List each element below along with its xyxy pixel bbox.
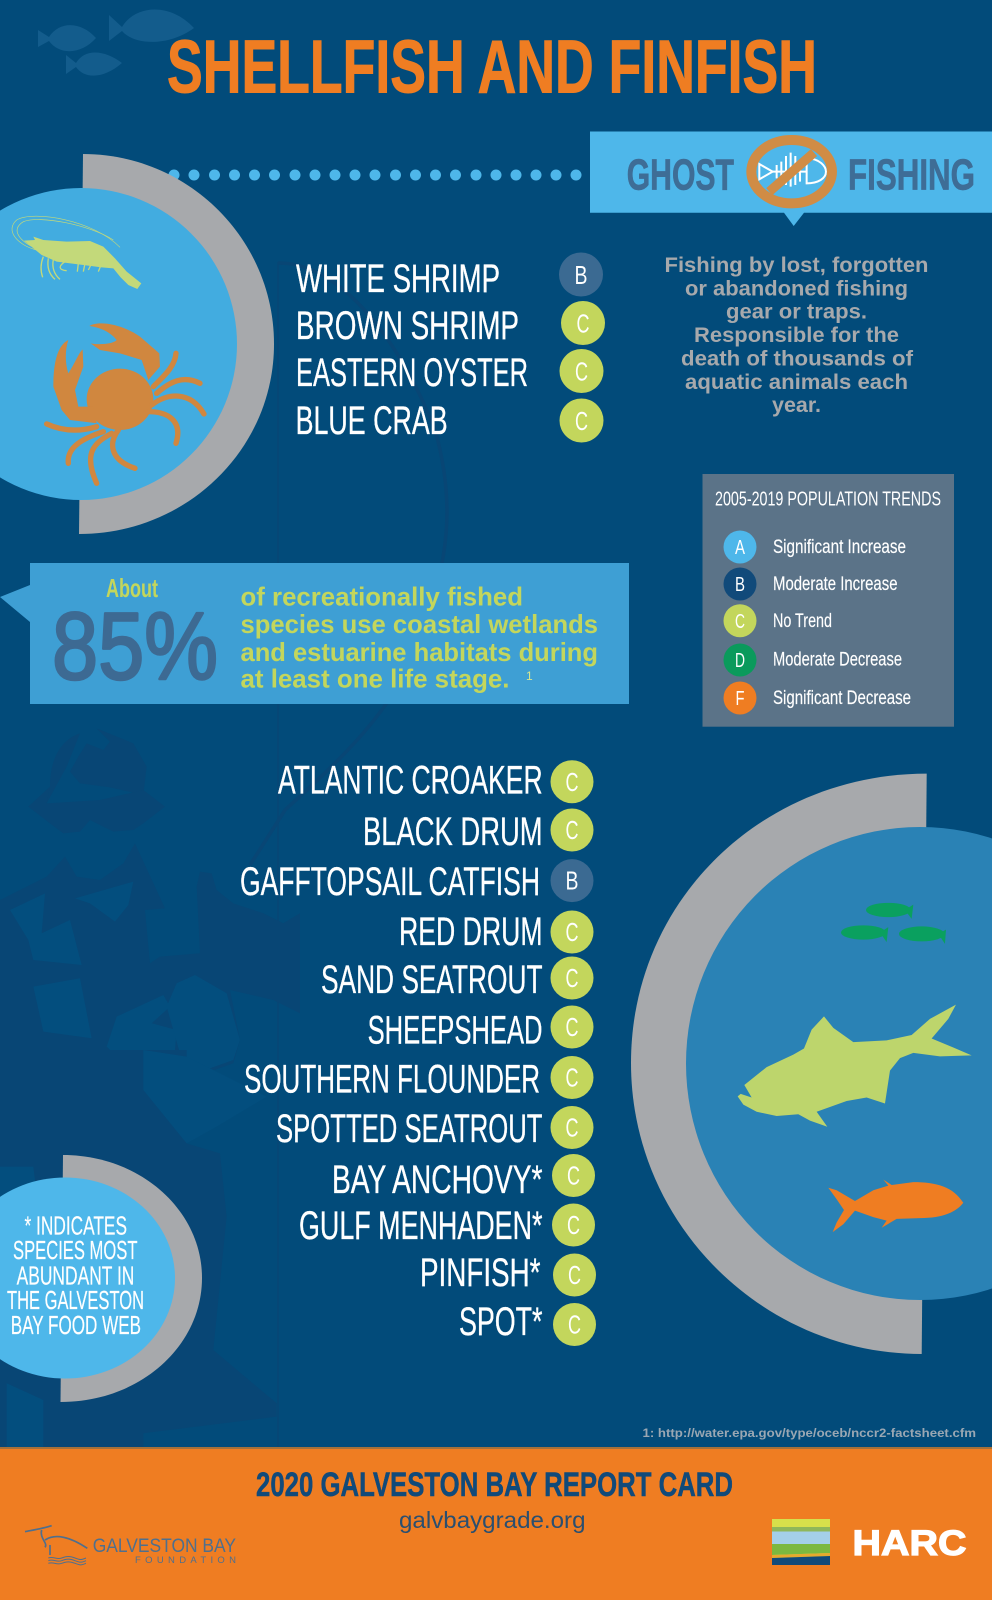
background silhouette: fisherman [0, 262, 447, 1448]
note text: * INDICATES [24, 1211, 127, 1241]
sheepshead: SHEEPSHEAD [368, 1009, 542, 1053]
legend: B [724, 568, 898, 600]
sand seatrout: C [566, 963, 578, 993]
dotted connector [168, 170, 582, 180]
legend: C [724, 604, 832, 637]
callout: 85 percent [0, 563, 629, 704]
text block: ghost fishing definition: gear or traps. [726, 300, 867, 324]
pinfish: C [568, 1260, 581, 1290]
legend: F: F [736, 688, 744, 710]
text block: ghost fishing definition: Responsible for the [694, 323, 899, 347]
text block: ghost fishing definition: Fishing by lost, forgotten [664, 253, 928, 277]
text block: ghost fishing definition: death of thousands of [681, 347, 914, 371]
icon: shrimp [12, 216, 141, 289]
legend: C: No Trend [773, 611, 832, 632]
note text: SPECIES MOST [13, 1235, 138, 1265]
gafftopsail catfish: B [566, 866, 578, 896]
footer band [0, 1447, 992, 1600]
spot: C [568, 1310, 581, 1340]
footer url: galvbaygrade.org [399, 1507, 586, 1533]
about label: About [106, 573, 158, 603]
legend: A: Significant Increase [773, 537, 906, 558]
icon: crab [47, 323, 204, 483]
note text [7, 1211, 144, 1340]
blue crab row: C [575, 406, 588, 436]
eastern oyster row: EASTERN OYSTER [296, 351, 528, 395]
icon: orange fish [828, 1180, 963, 1232]
brown shrimp row: C [576, 308, 590, 338]
big number: 85% [52, 593, 218, 700]
black drum: BLACK DRUM [363, 810, 543, 854]
logo: Galveston Bay Foundation [25, 1526, 236, 1566]
southern flounder: SOUTHERN FLOUNDER [244, 1058, 540, 1102]
panel: finfish circle [631, 774, 992, 1354]
panel: population trends legend [702, 474, 954, 727]
legend: D: D [735, 650, 745, 672]
logo: Galveston Bay Foundation: FOUNDATION [135, 1555, 236, 1566]
eastern oyster row: C [575, 356, 588, 386]
footer heading: 2020 GALVESTON BAY REPORT CARD [256, 1466, 733, 1504]
spotted seatrout: SPOTTED SEATROUT [276, 1107, 542, 1151]
panel: ghost fishing banner [590, 132, 992, 226]
legend: F: Significant Decrease [773, 688, 911, 709]
finfish list [240, 759, 596, 1346]
note text: BAY FOOD WEB [11, 1310, 141, 1340]
legend: D: Moderate Decrease [773, 650, 902, 670]
panel: shellfish circle [0, 154, 274, 534]
text block: ghost fishing definition: year. [772, 393, 821, 417]
bay anchovy: C [567, 1160, 580, 1190]
blue crab row: BLUE CRAB [296, 399, 448, 443]
legend: A: A [735, 537, 745, 559]
sheepshead: C [566, 1012, 578, 1042]
icon: no fish bones [751, 140, 832, 203]
legend: B: Moderate Increase [773, 574, 898, 595]
text block: ghost fishing definition: aquatic animals each [685, 370, 908, 394]
atlantic croaker: ATLANTIC CROAKER [278, 759, 543, 803]
gafftopsail catfish: GAFFTOPSAIL CATFISH [240, 860, 540, 904]
white shrimp row: WHITE SHRIMP [296, 257, 500, 301]
legend: B: B [735, 574, 745, 596]
red drum: RED DRUM [399, 910, 542, 954]
callout text: and estuarine habitats during [240, 637, 598, 667]
legend: D [724, 644, 902, 676]
spotted seatrout: C [566, 1112, 578, 1142]
callout text [240, 582, 598, 694]
callout text: at least one life stage. [240, 664, 510, 694]
panel: asterisk note circle [0, 1155, 202, 1402]
shellfish list [296, 252, 605, 443]
black drum: C [566, 815, 578, 845]
gulf menhaden: C [567, 1210, 580, 1240]
icon: small green fish school [841, 903, 946, 944]
decorative translucent fish [38, 9, 194, 76]
white shrimp row: B [574, 260, 588, 290]
logo: Galveston Bay Foundation: GALVESTON BAY [93, 1535, 236, 1557]
spot: SPOT* [459, 1300, 542, 1344]
icon: large green fish [738, 1005, 972, 1127]
legend: A [724, 530, 906, 564]
text block: ghost fishing definition [664, 253, 928, 417]
callout text: species use coastal wetlands [240, 609, 598, 639]
sand seatrout: SAND SEATROUT [321, 958, 542, 1002]
bay anchovy: BAY ANCHOVY* [332, 1158, 542, 1202]
southern flounder: C [566, 1062, 578, 1092]
text block: ghost fishing definition: or abandoned fishing [685, 276, 908, 300]
red drum: C [566, 917, 578, 947]
note text: THE GALVESTON [7, 1285, 144, 1315]
logo: HARC: HARC [852, 1524, 966, 1563]
footnote source: 1: http://water.epa.gov/type/oceb/nccr2-factsheet.cfm [642, 1426, 976, 1440]
legend: F [724, 682, 911, 714]
brown shrimp row: BROWN SHRIMP [296, 304, 519, 348]
pinfish: PINFISH* [420, 1251, 540, 1295]
gulf menhaden: GULF MENHADEN* [299, 1204, 542, 1248]
note text: ABUNDANT IN [17, 1261, 134, 1291]
callout text: of recreationally fished [240, 582, 523, 612]
heading: ghost: GHOST [627, 150, 734, 199]
legend: C: C [735, 611, 745, 633]
callout text: 1 [526, 669, 533, 683]
atlantic croaker: C [566, 767, 578, 797]
logo: HARC [772, 1519, 966, 1565]
